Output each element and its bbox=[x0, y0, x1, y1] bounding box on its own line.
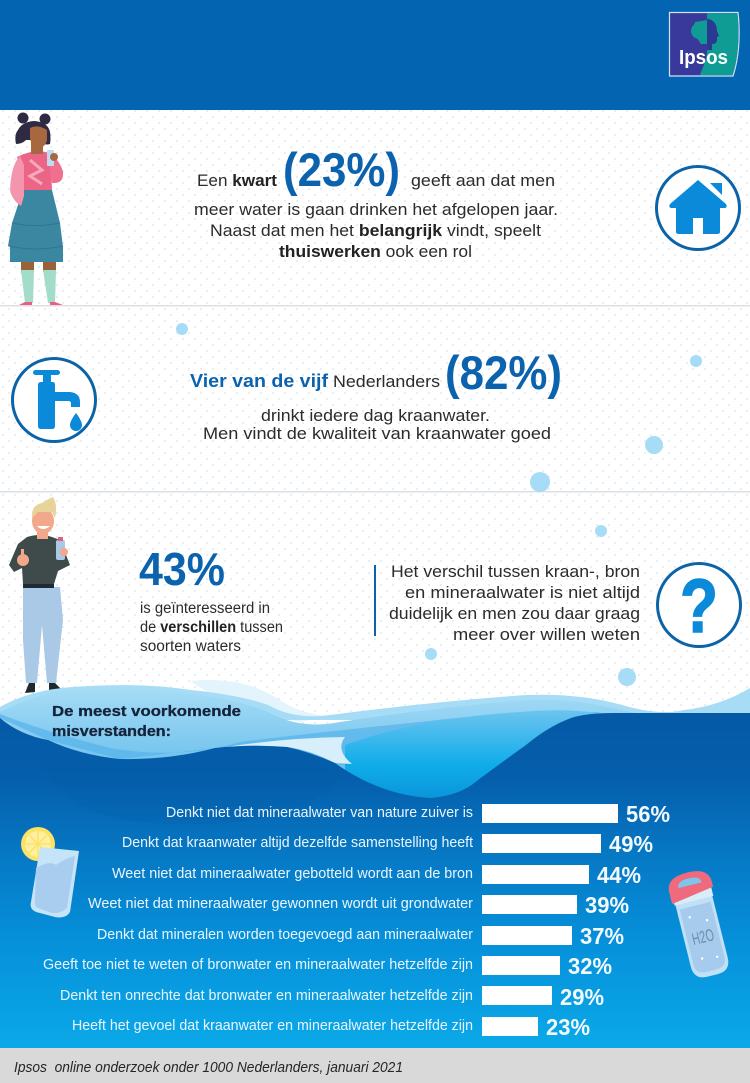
illustration: glass with lemon bbox=[21, 827, 79, 917]
icon: tap bbox=[12, 358, 96, 442]
bar row 29% bbox=[60, 984, 604, 1010]
illustration: H2O bottle: H2O bbox=[690, 925, 716, 949]
bar row 56% bbox=[166, 801, 670, 827]
icon: question mark bbox=[658, 564, 740, 649]
text: body lines: Men vindt de kwaliteit van kraanwater goed bbox=[203, 424, 551, 443]
text: body lines: Naast dat men het belangrijk vindt, speelt bbox=[210, 221, 541, 240]
footer bbox=[0, 1048, 750, 1083]
text: body lines: meer water is gaan drinken het afgelopen jaar. bbox=[194, 200, 558, 219]
illustration: man with bottle bbox=[9, 497, 70, 693]
waves bbox=[0, 680, 750, 1048]
bar row 56%: 56% bbox=[626, 801, 670, 827]
bar row 37%: Denkt dat mineralen worden toegevoegd aan mineraalwater bbox=[97, 927, 473, 943]
bar row 44% bbox=[112, 862, 641, 888]
text: body lines: drinkt iedere dag kraanwater. bbox=[261, 406, 490, 425]
panel: kwart drinkt meer water bbox=[8, 112, 740, 305]
logo: Ipsos bbox=[670, 12, 739, 76]
text: een kwart: Een kwart bbox=[197, 171, 277, 190]
bar row 23% bbox=[72, 1014, 590, 1040]
text: difference explanation: duidelijk en men zou daar graag bbox=[389, 604, 640, 623]
bar row 23%: Heeft het gevoel dat kraanwater en mineraalwater hetzelfde zijn bbox=[72, 1018, 473, 1034]
bar row 44%: Weet niet dat mineraalwater gebotteld wordt aan de bron bbox=[112, 866, 473, 882]
number: 43%: 43% bbox=[139, 543, 225, 595]
bar row 32%: Geeft toe niet te weten of bronwater en mineraalwater hetzelfde zijn bbox=[43, 957, 473, 973]
bar row 37%: 37% bbox=[580, 923, 624, 949]
icon: question mark: ? bbox=[680, 564, 718, 649]
bubbles bbox=[176, 323, 702, 686]
panel: verschillen bbox=[9, 497, 740, 693]
bar row 39% bbox=[88, 892, 629, 918]
bar row 44%: 44% bbox=[597, 862, 641, 888]
text: interest: is geïnteresseerd in bbox=[140, 600, 270, 617]
text: Nederlanders: Nederlanders bbox=[333, 372, 440, 391]
bar row 32%: 32% bbox=[568, 953, 612, 979]
bar row 56%: Denkt niet dat mineraalwater van nature zuiver is bbox=[166, 805, 473, 821]
text: interest: de verschillen tussen bbox=[140, 619, 283, 636]
text: interest: soorten waters bbox=[140, 638, 241, 655]
separator lines bbox=[0, 305, 750, 306]
text: body lines: thuiswerken ook een rol bbox=[279, 242, 472, 261]
heading: misverstanden: misverstanden: bbox=[52, 723, 171, 740]
illustration: woman drinking bbox=[8, 112, 63, 305]
bar row 29%: Denkt ten onrechte dat bronwater en mineraalwater hetzelfde zijn bbox=[60, 988, 473, 1004]
text: body lines bbox=[194, 200, 558, 261]
icon: house bbox=[656, 166, 740, 250]
bar row 29%: 29% bbox=[560, 984, 604, 1010]
number: 82%: (82%) bbox=[445, 346, 562, 399]
text: body lines bbox=[203, 406, 551, 443]
bar row 39%: 39% bbox=[585, 892, 629, 918]
heading: misverstanden bbox=[52, 703, 241, 740]
logo: Ipsos: Ipsos bbox=[679, 47, 728, 69]
text: difference explanation: Het verschil tussen kraan-, bron bbox=[391, 562, 640, 581]
bar row 49% bbox=[122, 831, 653, 857]
divider bar bbox=[374, 565, 376, 636]
bar row 32% bbox=[43, 953, 612, 979]
footer: Ipsos online onderzoek onder 1000 Nederlanders, januari 2021 bbox=[14, 1060, 403, 1076]
header band bbox=[0, 0, 750, 110]
text: difference explanation: en mineraalwater is niet altijd bbox=[405, 583, 640, 602]
bar row 49%: Denkt dat kraanwater altijd dezelfde samenstelling heeft bbox=[122, 835, 473, 851]
text: geeft aan dat men: geeft aan dat men bbox=[411, 171, 555, 190]
bar chart bbox=[43, 801, 670, 1040]
heading: misverstanden: De meest voorkomende bbox=[52, 703, 241, 720]
bar row 49%: 49% bbox=[609, 831, 653, 857]
bar row 39%: Weet niet dat mineraalwater gewonnen wordt uit grondwater bbox=[88, 896, 473, 912]
text: vier van de vijf: Vier van de vijf bbox=[190, 371, 329, 391]
number: 23%: (23%) bbox=[283, 143, 400, 196]
bar row 37% bbox=[97, 923, 624, 949]
text: difference explanation: meer over willen weten bbox=[453, 625, 640, 644]
text: interest bbox=[140, 600, 283, 655]
panel: kraanwater bbox=[12, 346, 562, 443]
illustration: H2O bottle bbox=[666, 867, 734, 981]
text: difference explanation bbox=[389, 562, 640, 644]
bar row 23%: 23% bbox=[546, 1014, 590, 1040]
